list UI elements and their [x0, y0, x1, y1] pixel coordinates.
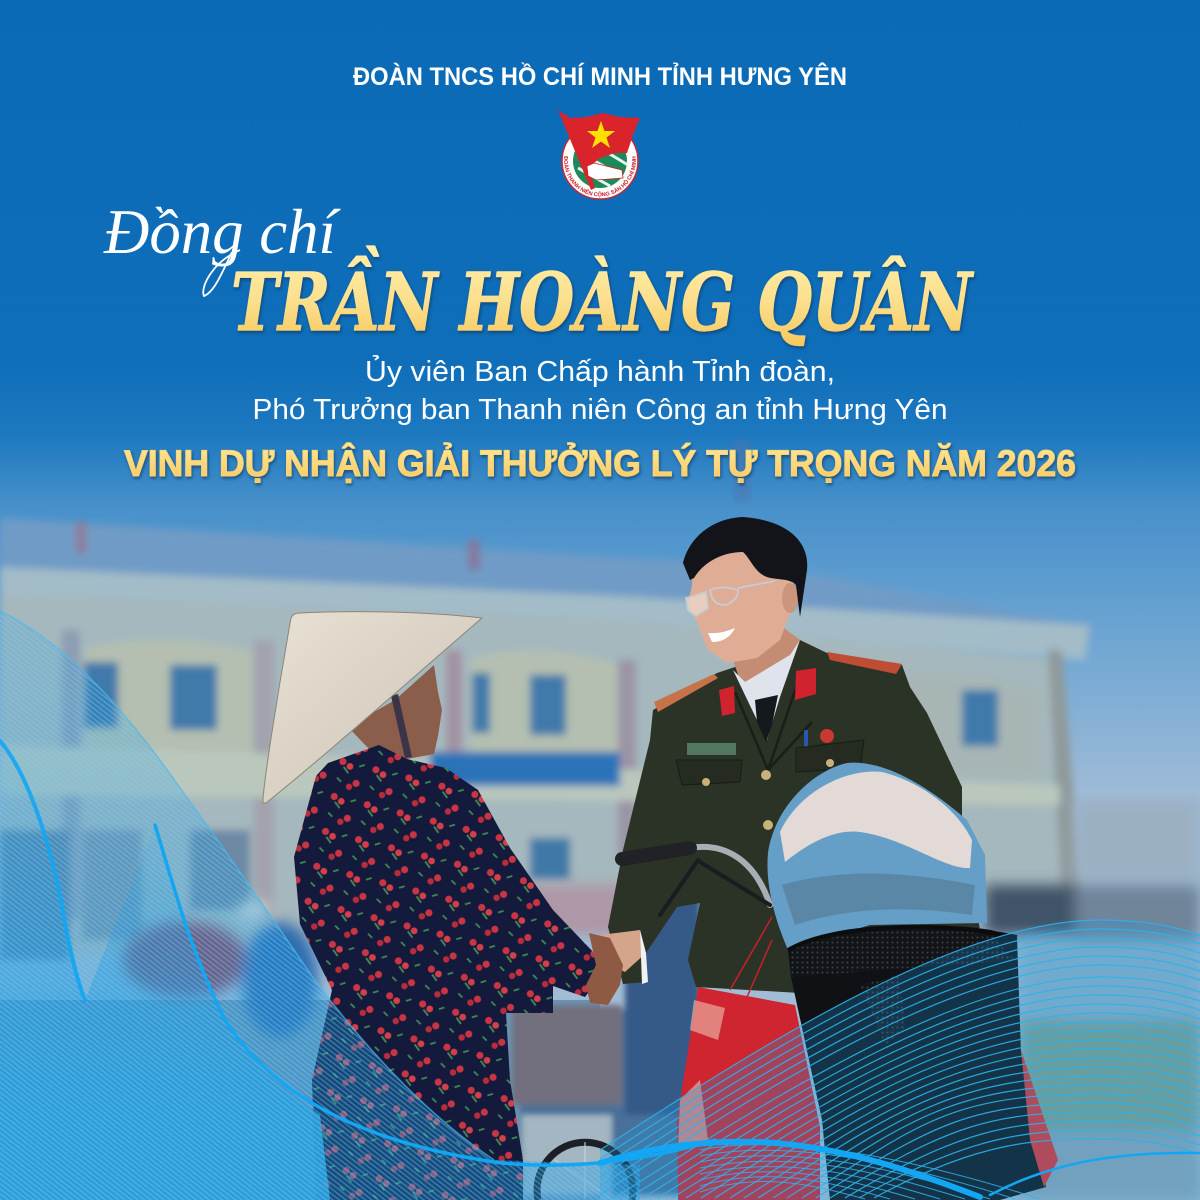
background photo: sky pole and flag: [734, 440, 750, 502]
background photo: building: [0, 518, 1090, 960]
wave: right translucent fan: [600, 920, 1200, 1200]
background photo: ground: [0, 1000, 600, 1200]
hair: [683, 517, 807, 617]
wave: left outer edge: [0, 611, 494, 1160]
collar tabs and shoulder boards: [654, 652, 902, 830]
clasped hands: [586, 930, 648, 1005]
bicycle handlebar: [622, 847, 770, 915]
wave: solid lower left fill: [0, 741, 330, 1200]
script salutation: Đồng chí: [103, 196, 341, 267]
background photo: vehicles and crowd: [123, 800, 1200, 1200]
face: [688, 545, 798, 663]
red gift bag: [677, 987, 820, 1200]
flag: [558, 110, 640, 190]
lapel shading: [735, 682, 812, 770]
shirt and tie: [733, 640, 800, 740]
star: [587, 121, 615, 148]
red bag at lower right: [1021, 1050, 1058, 1187]
honoree name: TRẦN HOÀNG QUÂN: [231, 245, 974, 349]
floral blouse: [294, 745, 596, 1200]
wave: left fine hatch lines: [0, 611, 640, 1200]
bicycle wheel: [537, 1142, 633, 1200]
conical hat: [263, 612, 482, 803]
smile: [708, 628, 735, 642]
uniform jacket: [608, 640, 980, 993]
ear: [782, 583, 798, 613]
wave: right fine lines: [600, 920, 1200, 1198]
position line 2: Phó Trưởng ban Thanh niên Công an tỉnh Hưng Yên: [252, 394, 948, 426]
red bag highlights and label: [678, 1000, 725, 1150]
man in police uniform: [608, 517, 980, 993]
plastic wrapped bundle: [767, 763, 987, 950]
youth union logo: [558, 110, 640, 200]
wire basket: [788, 925, 1046, 1200]
wave: bright bands: [0, 741, 1200, 1197]
hat strap: [391, 694, 412, 758]
red bag strings: [730, 917, 772, 997]
award line: VINH DỰ NHẬN GIẢI THƯỞNG LÝ TỰ TRỌNG NĂM 2026: [124, 442, 1076, 484]
elderly woman with conical hat: [263, 612, 596, 1200]
fist: [587, 163, 623, 180]
neck and face: [348, 665, 442, 759]
wave: bottom fine lines: [700, 1145, 1040, 1199]
glasses: [686, 581, 775, 616]
ring text: ĐOÀN THANH NIÊN CỘNG SẢN HỒ CHÍ MINH: [564, 156, 636, 198]
wave: left translucent fan: [0, 611, 640, 1200]
background photo: blue car and cargo behind handshake: [512, 895, 700, 1195]
organization heading: ĐOÀN TNCS HỒ CHÍ MINH TỈNH HƯNG YÊN: [353, 61, 847, 91]
position line 1: Ủy viên Ban Chấp hành Tỉnh đoàn,: [365, 354, 835, 388]
neck: [733, 625, 800, 695]
